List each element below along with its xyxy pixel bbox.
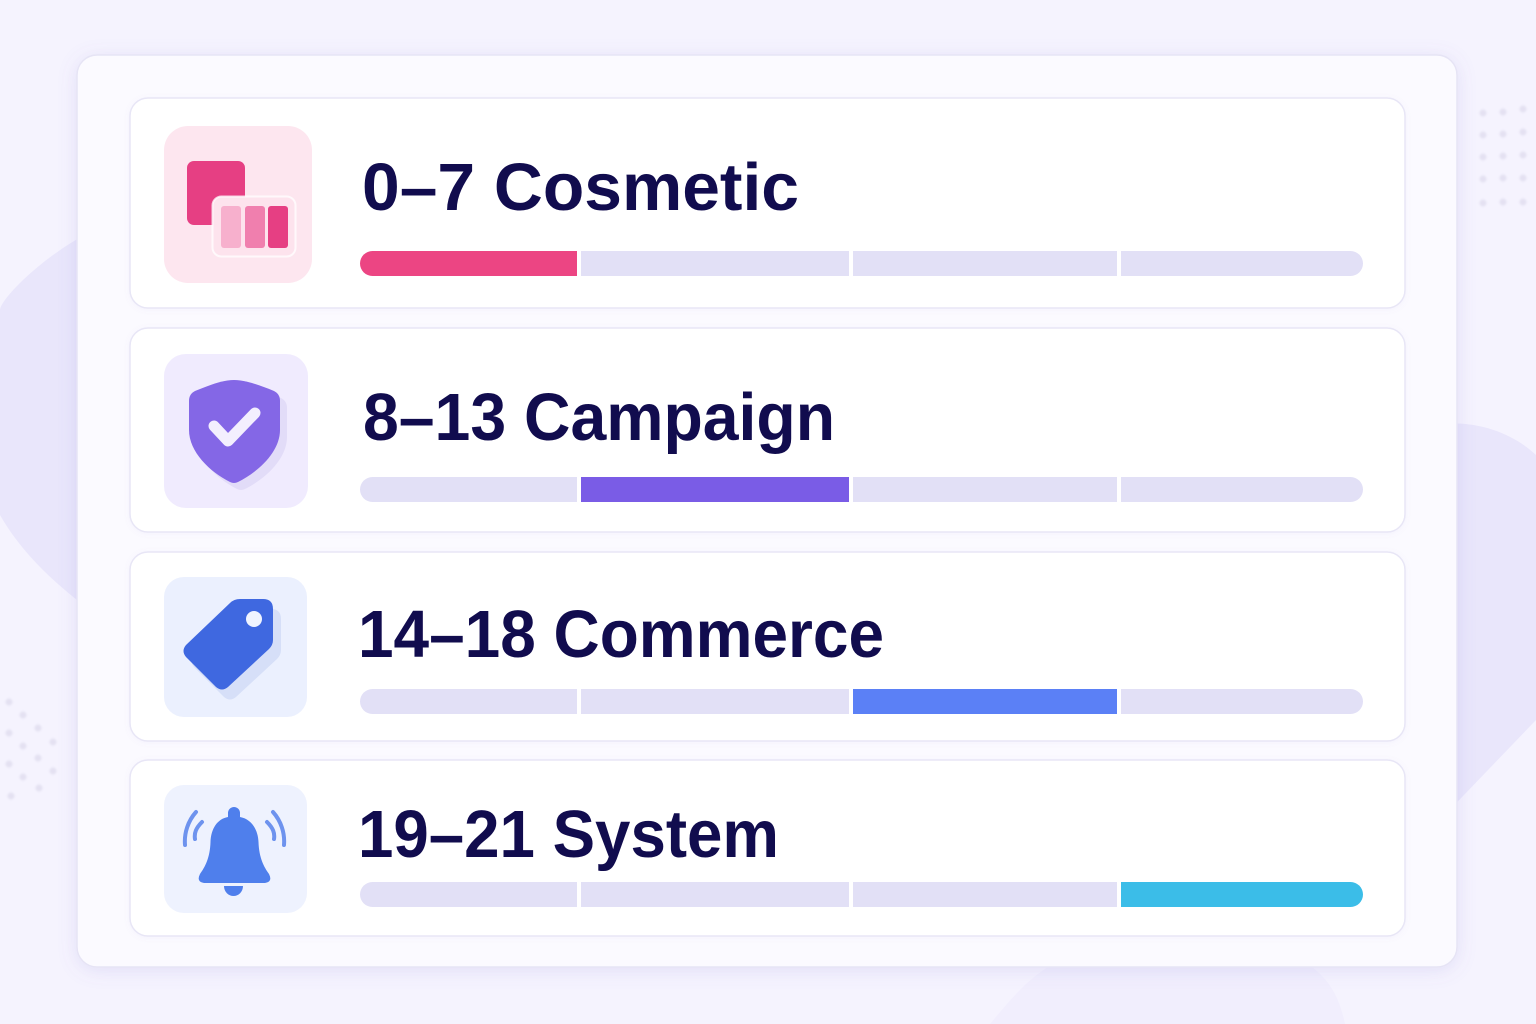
heading: 0-7 Cosmetic: 0–7 Cosmetic [362, 150, 799, 225]
progress bar: segment 4 active [360, 882, 1363, 907]
decorative dots: top right [1480, 106, 1526, 206]
icon: price tag [164, 577, 307, 717]
progress bar: segment 1 active [360, 251, 1363, 276]
panel: 19-21 System [130, 760, 1405, 936]
heading: 19-21 System: 19–21 System [358, 797, 779, 872]
icon: overlapping layers [164, 126, 312, 283]
heading: 14-18 Commerce: 14–18 Commerce [358, 597, 884, 672]
heading: 8-13 Campaign: 8–13 Campaign [363, 380, 835, 455]
progress bar: segment 3 active [360, 689, 1363, 714]
decorative dots: bottom left [6, 698, 56, 800]
icon: ringing bell [164, 785, 307, 913]
icon: shield with check [164, 354, 308, 508]
panel: 8-13 Campaign [130, 328, 1405, 532]
panel: 14-18 Commerce [130, 552, 1405, 741]
progress bar: segment 2 active [360, 477, 1363, 502]
panel: 0-7 Cosmetic [130, 98, 1405, 308]
